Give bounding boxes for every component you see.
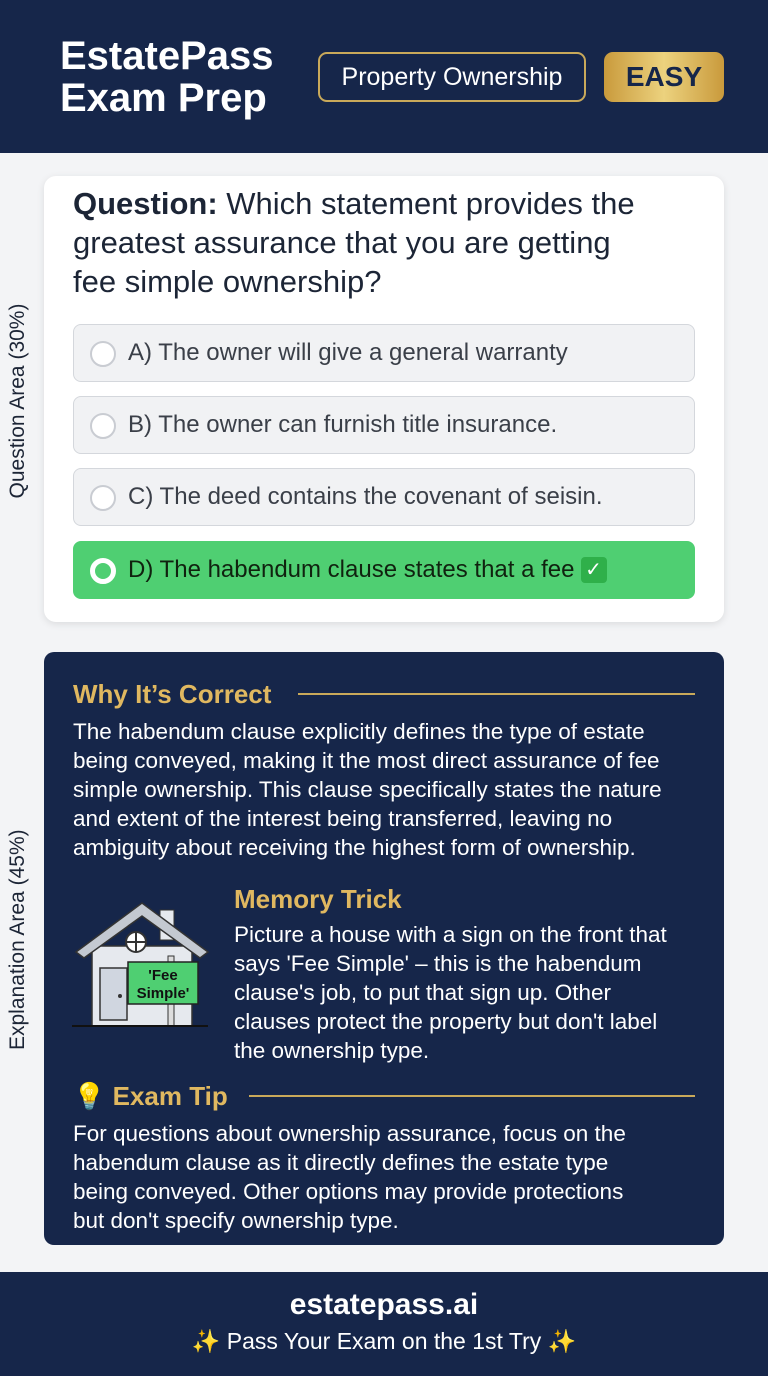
heading: exam tip: 💡 Exam Tip: [73, 1081, 228, 1111]
label: question area: Question Area (30%): [6, 304, 29, 498]
option D correct: ✓: [585, 559, 602, 581]
footer tagline: ✨ Pass Your Exam on the 1st Try ✨: [192, 1328, 576, 1354]
icon: house with sign: 'Fee: [148, 967, 178, 984]
option B: B) The owner can furnish title insurance.: [128, 411, 557, 438]
badge: topic: [318, 52, 586, 102]
option A: A) The owner will give a general warranty: [128, 339, 568, 366]
text: exam tip: For questions about ownership assurance, focus on the habendum clause as it directly defines the estate type being conveyed. Other options may provide protections but don't specify ownership type.: [73, 1121, 626, 1233]
title: Exam Prep: [60, 76, 267, 120]
label: explanation area: Explanation Area (45%): [6, 829, 29, 1050]
icon: house with sign: [72, 902, 209, 1027]
panel: explanation: [44, 652, 724, 1245]
heading: why correct: Why It’s Correct: [73, 679, 271, 709]
footer site: estatepass.ai: [290, 1288, 478, 1321]
option A: [73, 324, 695, 382]
footer: [0, 1272, 768, 1376]
option B: [73, 396, 695, 454]
question text: Question: Which statement provides the greatest assurance that you are getting fee simple ownership?: [73, 186, 635, 299]
heading: memory trick: Memory Trick: [234, 884, 402, 914]
option D correct: [73, 541, 695, 599]
icon: house with sign: Simple': [137, 985, 189, 1002]
title: EstatePass: [60, 34, 273, 78]
text: why correct: The habendum clause explicitly defines the type of estate being conveyed, making it the most direct assurance of fee simple ownership. This clause specifically states the nature and extent of the interest being transferred, leaving no ambiguity about receiving the highest form of ownership.: [73, 719, 662, 860]
option C: [73, 468, 695, 526]
text: memory trick: Picture a house with a sign on the front that says 'Fee Simple' – this is the habendum clause's job, to put that sign up. Other clauses protect the property but don't label the ownership type.: [234, 922, 667, 1063]
panel: question: [44, 176, 724, 622]
badge: difficulty: EASY: [626, 61, 702, 92]
header: [0, 0, 768, 153]
title: [60, 34, 273, 120]
option D correct: D) The habendum clause states that a fee: [128, 556, 574, 583]
option C: C) The deed contains the covenant of seisin.: [128, 483, 603, 510]
badge: topic: Property Ownership: [342, 62, 562, 90]
badge: difficulty: [604, 52, 724, 102]
